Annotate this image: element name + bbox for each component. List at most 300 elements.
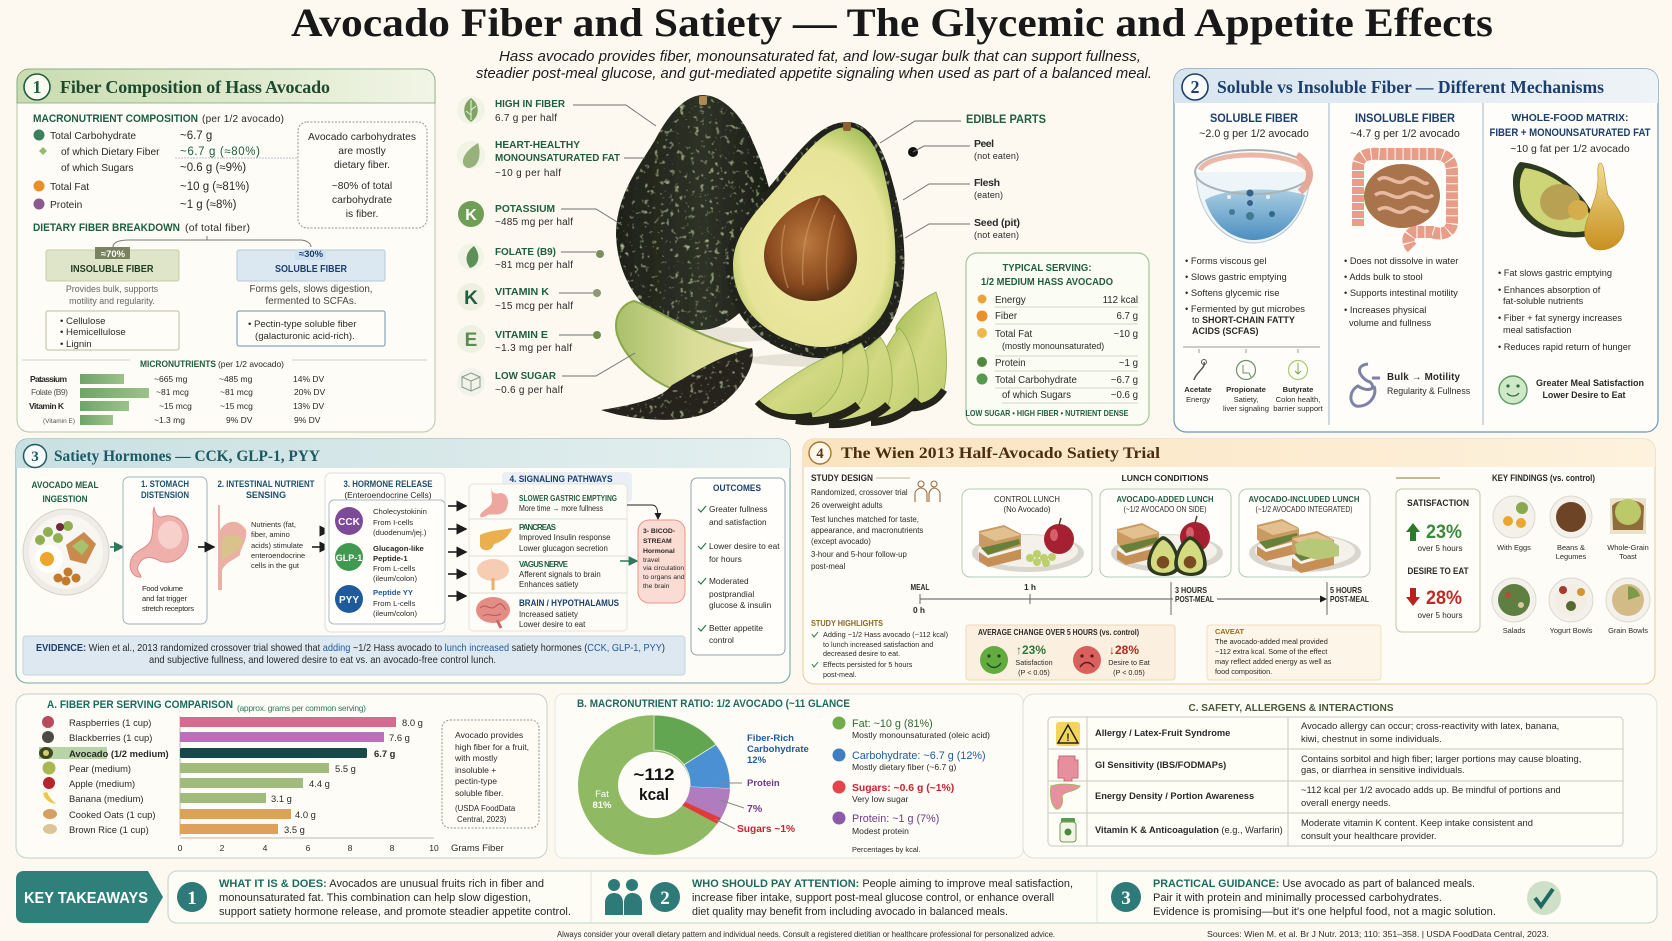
bar chart: 6.7 g: [374, 748, 396, 759]
whole avocado: [615, 95, 785, 343]
bar chart: Cooked Oats (1 cup): [69, 809, 156, 820]
callout: low sugar: LOW SUGAR: [495, 370, 556, 382]
panel 1: fiber composition: [17, 69, 435, 432]
micronutrients: ~485 mg: [219, 374, 253, 384]
card: avocado-added lunch: [1100, 489, 1231, 577]
column: soluble fiber: • Softens glycemic rise: [1185, 287, 1279, 298]
takeaway 1: WHAT IT IS & DOES: Avocados are unusual fruits rich in fiber and: [219, 878, 544, 890]
step: meal ingestion: INGESTION: [42, 494, 88, 505]
key finding stats: over 5 hours: [1418, 611, 1462, 620]
card: avocado-added lunch: (~1/2 AVOCADO ON SIDE): [1124, 505, 1207, 514]
callout: vitamin E: ~1.3 mg per half: [495, 343, 572, 354]
column: soluble fiber: • Forms viscous gel: [1185, 255, 1266, 266]
macronutrient composition table: ~10 g (≈81%): [180, 181, 249, 193]
macronutrient composition table: Protein: [50, 200, 82, 211]
donut chart: Fat: [595, 789, 609, 800]
panel C: safety table: Allergy / Latex-Fruit Syndrome: [1095, 728, 1230, 738]
caveat: [1207, 625, 1381, 680]
bar chart: Brown Rice (1 cup): [69, 824, 149, 835]
column: insoluble fiber: volume and fullness: [1349, 318, 1432, 328]
typical serving card: 1/2 MEDIUM HASS AVOCADO: [981, 276, 1113, 288]
dietary fiber breakdown: SOLUBLE FIBER: [275, 263, 347, 275]
bar chart: 4: [263, 843, 268, 853]
step 4: signaling pathways: [469, 472, 632, 631]
micronutrients: 14% DV: [293, 374, 325, 384]
column: insoluble fiber: Bulk → Motility: [1387, 372, 1461, 383]
study highlights: post-meal.: [823, 670, 857, 679]
column: soluble fiber: barrier support: [1273, 404, 1324, 413]
callout: vitamin K: ~15 mcg per half: [495, 301, 573, 312]
key findings: food pairings: Beans &: [1557, 543, 1585, 552]
key findings: food pairings: Legumes: [1556, 552, 1587, 561]
panel 3: satiety hormones: [16, 439, 790, 683]
study design: STUDY DESIGN: [811, 473, 873, 483]
dietary fiber breakdown: [33, 222, 385, 350]
step 3: hormone release: Glucagon-like: [373, 544, 425, 553]
donut legend: Modest protein: [852, 826, 909, 836]
micronutrients: Folate (B9): [31, 387, 68, 397]
column: insoluble fiber: • Does not dissolve in water: [1344, 256, 1458, 266]
step 3: hormone release: Peptide-1: [373, 554, 408, 563]
donut chart: Carbohydrate: [747, 744, 809, 755]
column: whole-food matrix: WHOLE-FOOD MATRIX:: [1512, 112, 1628, 124]
typical serving card: 112 kcal: [1103, 295, 1138, 306]
column: soluble fiber: Satiety,: [1234, 395, 1258, 404]
dietary fiber breakdown: INSOLUBLE FIBER: [70, 263, 154, 275]
typical serving card: (mostly monounsaturated): [1002, 341, 1104, 351]
takeaway 2: increase fiber intake, support post-meal glucose control, or enhance overall: [692, 892, 1054, 904]
step 3: hormone release: Cholecystokinin: [373, 507, 427, 516]
outcomes: [691, 478, 785, 655]
step 1: stomach distension: 1. STOMACH: [141, 479, 189, 490]
panel C: safety table: Moderate vitamin K content. Keep intake consistent and: [1301, 817, 1533, 828]
key finding stats: 28%: [1426, 588, 1462, 609]
step 5: bloodstream: [620, 505, 685, 603]
study highlights: to lunch increased satisfaction and: [823, 640, 933, 649]
outcomes: Better appetite: [709, 623, 763, 633]
callout: heart-healthy fat: HEART-HEALTHY: [495, 139, 580, 151]
study design: [811, 473, 940, 571]
edible parts labels: (not eaten): [974, 151, 1019, 161]
donut legend: Fat: ~10 g (81%): [852, 718, 933, 730]
sources: Sources: Wien M. et al. Br J Nutr. 2013; 110: 351–358. | USDA FoodData Central, 2023.: [1207, 929, 1549, 939]
typical serving card: ~0.6 g: [1111, 390, 1138, 401]
bar chart: Apple (medium): [69, 778, 135, 789]
card: avocado-included lunch: [1239, 489, 1370, 577]
step 1: stomach distension: stretch receptors: [142, 604, 194, 613]
callout: avocado fiber note: pectin-type: [455, 776, 497, 786]
step 2: intestinal sensing: 2. INTESTINAL NUTRIENT: [218, 479, 315, 490]
column: soluble fiber: ~2.0 g per 1/2 avocado: [1199, 128, 1309, 140]
timeline: POST-MEAL: [1330, 594, 1369, 604]
bar chart: 5.5 g: [335, 763, 356, 774]
macronutrient composition table: ~6.7 g: [180, 130, 212, 142]
step 4: signaling pathways: 4. SIGNALING PATHWAYS: [510, 474, 613, 485]
takeaway 3: 3: [1121, 888, 1131, 909]
step 3: hormone release: From L-cells: [373, 599, 415, 608]
micronutrients: 9% DV: [294, 415, 321, 425]
step: meal ingestion: [23, 480, 123, 595]
bar chart: Grams Fiber: [451, 843, 504, 854]
study design: 3-hour and 5-hour follow-up: [811, 550, 907, 559]
typical serving card: LOW SUGAR • HIGH FIBER • NUTRIENT DENSE: [966, 408, 1129, 418]
edible parts labels: (not eaten): [974, 230, 1019, 240]
key findings: food pairings: Salads: [1503, 626, 1526, 635]
donut chart: ~112: [634, 765, 674, 784]
donut legend: [832, 716, 990, 854]
outcomes: postprandial: [709, 589, 754, 599]
step 2: intestinal sensing: cells in the gut: [251, 561, 300, 570]
step 2: intestinal sensing: enteroendocrine: [251, 551, 305, 560]
bar chart: 8: [390, 843, 395, 853]
caveat: ~112 extra kcal. Some of the effect: [1215, 647, 1327, 656]
key findings: food pairings: Toast: [1619, 552, 1637, 561]
outcomes: Lower desire to eat: [709, 541, 780, 551]
step 3: hormone release: (Enteroendocrine Cells): [344, 490, 432, 500]
step 5: bloodstream: to organs and: [643, 574, 685, 581]
outcomes: OUTCOMES: [713, 483, 761, 494]
key finding stats: DESIRE TO EAT: [1408, 566, 1469, 576]
icon: gel bowl: [1195, 150, 1311, 243]
outcomes: glucose & insulin: [709, 600, 772, 610]
step 2: intestinal sensing: fiber, amino: [251, 530, 290, 539]
bar chart: Blackberries (1 cup): [69, 732, 152, 743]
bar chart: [39, 716, 504, 854]
bar chart: 10: [429, 843, 439, 853]
icon: warning: !: [1066, 732, 1070, 744]
micronutrients: MICRONUTRIENTS: [140, 359, 216, 369]
bar chart: 4.4 g: [309, 778, 330, 789]
average change box: ↓28%: [1109, 643, 1139, 657]
macronutrient composition table: ~0.6 g (≈9%): [180, 162, 246, 174]
bar chart: Pear (medium): [69, 763, 131, 774]
panel C: safety table: Contains sorbitol and high fiber; larger portions may cause bloating,: [1301, 753, 1581, 764]
caveat: The avocado-added meal provided: [1215, 637, 1328, 646]
average change box: (P < 0.05): [1018, 668, 1050, 677]
typical serving card: of which Sugars: [1002, 390, 1071, 401]
takeaway 2: 2: [660, 888, 670, 909]
heading 1: Fiber Composition of Hass Avocado: [60, 77, 330, 97]
icon: small stomach: [480, 488, 508, 517]
average change box: ↑23%: [1016, 643, 1046, 657]
micronutrients: 13% DV: [293, 401, 325, 411]
dietary fiber breakdown: fermented to SCFAs.: [266, 296, 356, 307]
edible parts labels: (eaten): [974, 190, 1003, 200]
panel C: safety table: Avocado allergy can occur; cross-reactivity with latex, banana,: [1301, 720, 1559, 731]
callout: avocado fiber note: (USDA FoodData: [455, 804, 516, 813]
callout: avocado fiber note: Central, 2023): [457, 815, 507, 824]
key finding stats: over 5 hours: [1418, 544, 1462, 553]
timeline: [910, 582, 1369, 615]
donut chart: 81%: [592, 800, 612, 811]
typical serving card: ~6.7 g: [1111, 375, 1138, 386]
study design: Randomized, crossover trial: [811, 488, 908, 497]
callout: folate: FOLATE (B9): [495, 246, 556, 258]
evidence callout: [23, 636, 685, 675]
takeaway 2: [605, 878, 1073, 918]
avocado slices: [757, 292, 946, 424]
icon: intestine: [1058, 756, 1078, 781]
step 3: hormone release: From I-cells: [373, 518, 413, 527]
icon: intestines: [1358, 154, 1452, 248]
outcomes: control: [709, 635, 734, 645]
callout: mostly fiber: dietary fiber.: [334, 160, 390, 171]
dietary fiber breakdown: • Hemicellulose: [60, 327, 126, 338]
callout: potassium: [458, 201, 622, 228]
takeaway 1: [177, 878, 571, 918]
step 2: intestinal sensing: [218, 479, 329, 590]
dietary fiber breakdown: ≈30%: [299, 249, 324, 260]
heading 1: [24, 74, 330, 100]
panel C: safety table: C. SAFETY, ALLERGENS & INTERACTIONS: [1188, 702, 1394, 714]
step 3: hormone release: 3. HORMONE RELEASE: [344, 479, 432, 490]
caveat: may reflect added energy as well as: [1215, 657, 1332, 666]
callout: mostly fiber: carbohydrate: [332, 195, 392, 206]
bar chart: 8: [348, 843, 353, 853]
key finding stats: 23%: [1426, 522, 1462, 543]
icon: avocado half with oil drop: [1513, 162, 1624, 250]
donut chart: 12%: [747, 755, 767, 766]
callout: folate: ~81 mcg per half: [495, 260, 573, 271]
study highlights: Adding ~1/2 Hass avocado (~112 kcal): [823, 630, 948, 639]
study highlights: [811, 619, 948, 679]
edible parts labels: EDIBLE PARTS: [966, 112, 1046, 126]
key takeaways banner: [16, 871, 163, 923]
micronutrients: ~15 mcg: [159, 401, 192, 411]
callout: avocado fiber note: soluble fiber.: [455, 788, 503, 798]
step: meal ingestion: AVOCADO MEAL: [32, 480, 99, 491]
heading 2: 2: [1190, 77, 1200, 97]
column: whole-food matrix: • Fiber + fat synergy increases: [1498, 313, 1622, 323]
outcomes: Greater fullness: [709, 504, 768, 514]
column: soluble fiber: [1183, 113, 1324, 413]
card: avocado-included lunch: AVOCADO-INCLUDED LUNCH: [1248, 494, 1360, 504]
column: whole-food matrix: • Reduces rapid return of hunger: [1498, 342, 1631, 352]
step 5: bloodstream: 3- BICOD-: [643, 528, 675, 535]
outcomes: for hours: [709, 554, 742, 564]
column: soluble fiber: Energy: [1186, 395, 1210, 404]
bar chart: 4.0 g: [295, 809, 316, 820]
column: whole-food matrix: [1490, 112, 1651, 404]
callout: high in fiber: [457, 96, 656, 126]
step 4: signaling pathways: Lower desire to eat: [519, 620, 586, 629]
panel B: macronutrient donut: B. MACRONUTRIENT RATIO: 1/2 AVOCADO (~11 GLANCE: [577, 698, 850, 710]
column: insoluble fiber: INSOLUBLE FIBER: [1355, 113, 1456, 125]
micronutrients: ~665 mg: [154, 374, 188, 384]
heading 1: 1: [32, 77, 42, 97]
outcomes: and satisfaction: [709, 517, 767, 527]
icon: SCFA molecules: [1194, 360, 1308, 380]
subtitle: Hass avocado provides fiber, monounsaturated fat, and low-sugar bulk that can support fullness,: [499, 48, 1141, 65]
micronutrients: Patassium: [30, 374, 67, 384]
heading 4: The Wien 2013 Half-Avocado Satiety Trial: [841, 445, 1161, 462]
panel C: safety table: overall energy needs.: [1301, 797, 1391, 808]
title: Avocado Fiber and Satiety — The Glycemic and Appetite Effects: [291, 0, 1493, 45]
column: insoluble fiber: ~4.7 g per 1/2 avocado: [1350, 128, 1460, 140]
callout: mostly fiber: [298, 122, 427, 228]
study highlights: STUDY HIGHLIGHTS: [811, 619, 883, 628]
study highlights: decreased desire to eat.: [823, 649, 900, 658]
donut chart: kcal: [639, 785, 669, 804]
step 4: signaling pathways: Lower glucagon secretion: [519, 544, 608, 553]
step 4: signaling pathways: More time → more fullness: [519, 504, 603, 513]
typical serving card: Total Carbohydrate: [995, 375, 1077, 386]
callout: mostly fiber: ~80% of total: [332, 181, 392, 192]
average change box: (P < 0.05): [1113, 668, 1145, 677]
timeline: MEAL: [910, 582, 930, 592]
panel 2: soluble vs insoluble fiber: [1174, 69, 1658, 432]
donut legend: Protein: ~1 g (7%): [852, 813, 939, 825]
icon: warning: [1056, 722, 1080, 746]
callout: avocado fiber note: Avocado provides: [455, 730, 523, 740]
evidence callout: EVIDENCE: Wien et al., 2013 randomized crossover trial showed that adding ~1/2 Hass avocado to lunch increased satiety hormones (CCK, GLP-1, PYY): [36, 643, 665, 654]
panel A: fiber per serving chart: A. FIBER PER SERVING COMPARISON: [47, 699, 233, 711]
callout: mostly fiber: are mostly: [338, 146, 387, 157]
donut legend: Mostly monounsaturated (oleic acid): [852, 730, 990, 740]
footer note: Always consider your overall dietary pattern and individual needs. Consult a registered dietitian or healthcare professional for personalized advice.: [557, 930, 1055, 939]
panel C: safety table: Vitamin K & Anticoagulation (e.g., Warfarin): [1095, 825, 1283, 835]
typical serving card: Energy: [995, 295, 1026, 306]
card: avocado-included lunch: (~1/2 AVOCADO INTEGRATED): [1256, 505, 1353, 514]
panel C: safety table: Energy Density / Portion Awareness: [1095, 791, 1254, 801]
timeline: 5 HOURS: [1330, 585, 1362, 595]
panel A: fiber per serving chart: (approx. grams per common serving): [237, 703, 366, 713]
study design: (except avocado): [811, 537, 871, 546]
step 5: bloodstream: via circulation: [643, 565, 684, 572]
timeline: 1 h: [1024, 582, 1036, 592]
callout: heart-healthy fat: [457, 139, 645, 179]
dietary fiber breakdown: DIETARY FIBER BREAKDOWN: [33, 222, 180, 234]
step 1: stomach distension: [123, 477, 214, 624]
takeaway 3: [1111, 878, 1496, 918]
micronutrients: [22, 359, 427, 425]
column: whole-food matrix: ~10 g fat per 1/2 avocado: [1510, 143, 1630, 155]
icon: bulk coil: [1351, 364, 1380, 406]
step 4: signaling pathways: Enhances satiety: [519, 580, 578, 589]
step 3: hormone release: (ileum/colon): [373, 574, 417, 583]
panel A: fiber per serving chart: [16, 694, 547, 858]
caveat: CAVEAT: [1215, 627, 1244, 636]
step 2: intestinal sensing: SENSING: [246, 490, 286, 501]
macronutrient composition table: of which Dietary Fiber: [61, 147, 160, 158]
key takeaways banner: KEY TAKEAWAYS: [24, 890, 148, 907]
card: control lunch: CONTROL LUNCH: [994, 494, 1060, 504]
micronutrients: Vitamin K: [29, 401, 65, 411]
card: control lunch: (No Avocado): [1004, 505, 1051, 514]
callout: low sugar: ~0.6 g per half: [495, 385, 563, 396]
edible parts labels: Flesh: [974, 177, 1000, 189]
study design: 26 overweight adults: [811, 501, 883, 510]
column: soluble fiber: liver signaling: [1223, 404, 1269, 413]
column: whole-food matrix: Lower Desire to Eat: [1542, 390, 1626, 400]
caveat: food composition.: [1215, 667, 1272, 676]
macronutrient composition table: (per 1/2 avocado): [202, 114, 284, 125]
key findings: food pairings: Whole-Grain: [1607, 543, 1649, 552]
bar chart: 2: [220, 843, 225, 853]
subtitle: [476, 48, 1152, 82]
panel C: safety table: [1023, 694, 1657, 858]
bar chart: 3.1 g: [271, 793, 292, 804]
study highlights: Effects persisted for 5 hours: [823, 660, 913, 669]
arrows to signaling pathways: [448, 506, 466, 596]
outcomes: Moderated: [709, 576, 749, 586]
nutrient callouts: [457, 96, 656, 396]
step 4: signaling pathways: Improved Insulin response: [519, 533, 610, 542]
callout: high in fiber: 6.7 g per half: [495, 113, 557, 124]
avocado wedge: [601, 301, 753, 420]
halved avocado: [726, 122, 915, 367]
column: insoluble fiber: Regularity & Fullness: [1387, 386, 1471, 396]
typical serving card: Protein: [995, 358, 1026, 369]
evidence callout: and subjective fullness, and lowered desire to eat vs. an avocado-free control lunch.: [149, 655, 496, 666]
donut chart: Sugars ~1%: [737, 824, 795, 835]
micronutrients: ~81 mcg: [156, 387, 189, 397]
donut chart: Fiber-Rich: [747, 733, 794, 744]
study design: post-meal: [811, 562, 846, 571]
callout: vitamin K: [457, 283, 601, 312]
takeaway 3: Pair it with protein and minimally processed carbohydrates.: [1153, 892, 1442, 904]
macronutrient composition table: Total Carbohydrate: [50, 131, 136, 142]
study design: Test lunches matched for taste,: [811, 515, 919, 524]
micronutrients: ~15 mcg: [220, 401, 253, 411]
step 3: hormone release: Peptide YY: [373, 588, 413, 597]
step 5: bloodstream: STREAM: [643, 538, 672, 545]
donut legend: Carbohydrate: ~6.7 g (12%): [852, 750, 986, 762]
study design: appearance, and macronutrients: [811, 526, 923, 535]
typical serving card: ~1 g: [1119, 358, 1138, 369]
bar chart: 3.5 g: [284, 824, 305, 835]
callout: low sugar: [457, 353, 635, 396]
step 5: bloodstream: travel: [643, 557, 660, 564]
column: soluble fiber: Propionate: [1226, 385, 1266, 394]
callout: mostly fiber: is fiber.: [346, 209, 378, 220]
macronutrient composition table: ~1 g (≈8%): [180, 199, 237, 211]
column: whole-food matrix: Greater Meal Satisfaction: [1536, 378, 1644, 388]
column: soluble fiber: Butyrate: [1283, 385, 1313, 394]
column: whole-food matrix: FIBER + MONOUNSATURATED FAT: [1490, 127, 1651, 139]
icon: pancreas: [480, 528, 512, 550]
step 3: hormone release: PYY: [339, 595, 359, 606]
panel B: macronutrient donut: [555, 694, 1023, 858]
takeaway 1: 1: [187, 888, 197, 909]
typical serving card: Total Fat: [995, 329, 1032, 340]
step 5: bloodstream: Hormonal: [643, 548, 675, 555]
heading 3: Satiety Hormones — CCK, GLP-1, PYY: [54, 448, 320, 465]
takeaway 3: PRACTICAL GUIDANCE: Use avocado as part of balanced meals.: [1153, 878, 1475, 890]
callout: high in fiber: HIGH IN FIBER: [495, 98, 565, 110]
card: control lunch: [962, 489, 1092, 577]
column: insoluble fiber: • Adds bulk to stool: [1344, 272, 1423, 282]
heading 3: 3: [31, 449, 39, 465]
callout: potassium: POTASSIUM: [495, 203, 555, 215]
takeaway 1: monounsaturated fat. This combination can help slow digestion,: [219, 892, 531, 904]
icon: happy face: [980, 646, 1008, 674]
heading 3: [24, 444, 320, 468]
icon: bottle: [1060, 818, 1076, 842]
panel C: safety table: GI Sensitivity (IBS/FODMAPs): [1095, 760, 1226, 770]
takeaway 1: support satiety hormone release, and promote steadier appetite control.: [219, 906, 571, 918]
step 1: stomach distension: and fat trigger: [142, 594, 187, 603]
column: insoluble fiber: • Increases physical: [1344, 305, 1426, 315]
column: whole-food matrix: meal satisfaction: [1503, 325, 1571, 335]
dietary fiber breakdown: Provides bulk, supports: [66, 284, 159, 294]
timeline: 0 h: [913, 605, 925, 615]
column: soluble fiber: SOLUBLE FIBER: [1210, 113, 1299, 125]
edible parts labels: Seed (pit): [974, 217, 1020, 229]
heading 4: [809, 442, 1161, 464]
heading 2: Soluble vs Insoluble Fiber — Different Mechanisms: [1217, 77, 1604, 97]
step 3: hormone release: From L-cells: [373, 564, 415, 573]
